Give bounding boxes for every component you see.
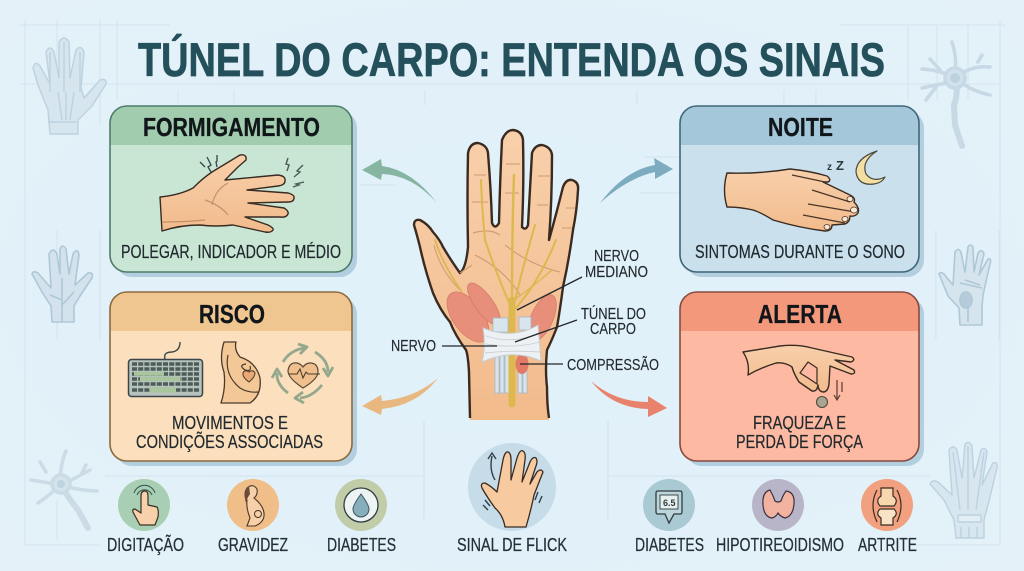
panel: risco (110, 292, 357, 466)
label: nervo: NERVO (391, 338, 436, 355)
central hand anatomy (414, 130, 578, 420)
icon: keyboard (128, 342, 202, 396)
label: hipotireoidismo: HIPOTIREOIDISMO (716, 534, 844, 555)
label: diabetes: DIABETES (327, 534, 396, 555)
text: risco: CONDIÇÕES ASSOCIADAS (136, 431, 323, 452)
label: artrite: ARTRITE (858, 534, 917, 555)
text: alerta: PERDA DE FORÇA (736, 432, 863, 452)
heading: formigamento: FORMIGAMENTO (143, 112, 320, 142)
icon: heart cycle (272, 344, 333, 403)
hand outline (414, 130, 578, 420)
icon: diabetes monitor (643, 479, 695, 531)
text: alerta (736, 413, 863, 452)
leader line: compressão (520, 363, 563, 365)
palm creases (460, 164, 575, 295)
icon: sinal de flick (468, 443, 556, 531)
text: risco (136, 413, 323, 452)
text: risco: MOVIMENTOS E (172, 413, 288, 433)
panel: noite (680, 106, 924, 277)
leader line: túnel do carpo (515, 320, 577, 342)
label: túnel do carpo: TÚNEL DO (581, 304, 646, 323)
icon: diabetes monitor: 6.5 (663, 498, 676, 508)
icon: weak hand dropping object (743, 345, 855, 408)
background icon: neuron top right (922, 42, 990, 146)
panel: formigamento (110, 106, 357, 277)
label: nervo mediano: NERVO (594, 248, 639, 265)
background icon: neuron bottom left (31, 451, 97, 528)
icon: big z: Z (836, 158, 844, 173)
icon: diabetes gota (335, 479, 387, 531)
label: gravidez: GRAVIDEZ (218, 534, 288, 555)
label: nervo mediano: MEDIANO (585, 264, 648, 281)
tendons (493, 317, 531, 393)
icon: gravidez (227, 479, 279, 531)
compression spot (516, 354, 528, 374)
label: túnel do carpo (581, 304, 646, 338)
label: diabetes 2: DIABETES (635, 534, 704, 555)
text: formigamento: POLEGAR, INDICADOR E MÉDIO (121, 242, 341, 262)
icon: pregnancy (221, 342, 260, 403)
background icon: skeletal hand top left (33, 38, 106, 134)
background icon: skeletal hand bottom right (930, 442, 997, 538)
heading: risco: RISCO (199, 299, 265, 329)
text: noite: SINTOMAS DURANTE O SONO (695, 242, 905, 262)
icon: tingling hand (160, 155, 304, 232)
carpal ligament (482, 325, 541, 362)
arrow: to formigamento (362, 159, 437, 203)
label: digitação: DIGITAÇÃO (107, 534, 184, 555)
label: túnel do carpo: CARPO (590, 321, 636, 338)
heading: alerta: ALERTA (758, 299, 842, 329)
label: compressão: COMPRESSÃO (567, 354, 659, 374)
icon: artrite (861, 479, 913, 531)
icon: moon (856, 151, 885, 184)
label: nervo mediano (585, 248, 648, 281)
arrow: to risco (362, 378, 438, 415)
heading: noite: NOITE (768, 112, 833, 142)
arrow: to noite (600, 158, 673, 203)
leader line: nervo mediano (517, 277, 582, 310)
leader line: nervo (442, 345, 497, 347)
icon: digitação (118, 479, 170, 531)
text: alerta: FRAQUEZA E (753, 413, 846, 433)
background icon: hand mid left (32, 246, 92, 322)
label: sinal de flick: SINAL DE FLICK (457, 534, 568, 555)
icon: sleeping hand (724, 169, 858, 231)
thenar muscles (439, 278, 562, 349)
arrow: to alerta (591, 381, 667, 417)
median nerve (435, 175, 556, 404)
icon: small z: z (827, 162, 832, 173)
background icon: hand mid right (939, 245, 991, 325)
panel: alerta (680, 292, 924, 466)
icon: hipotireoidismo (752, 479, 804, 531)
